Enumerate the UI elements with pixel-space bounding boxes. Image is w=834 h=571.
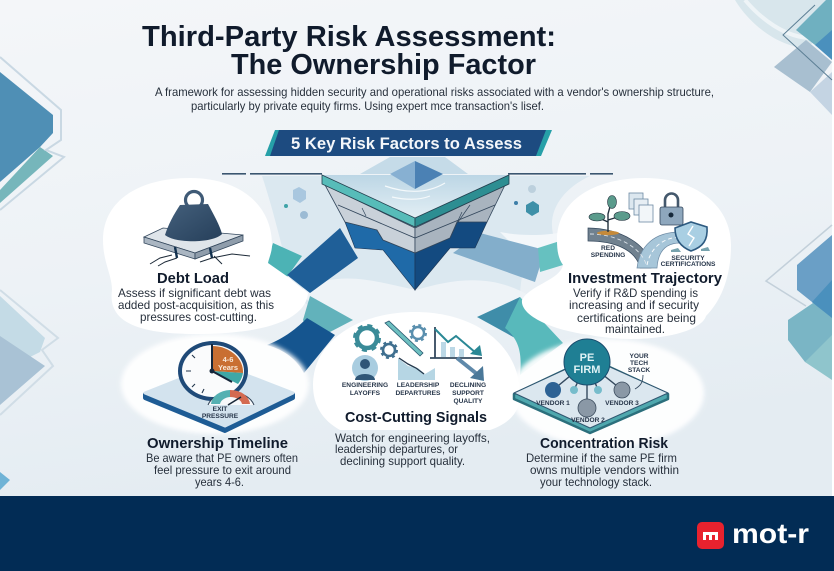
body text: added post-acquisition, as this xyxy=(118,299,274,312)
icon: weight on cracked slab xyxy=(144,192,250,266)
icon: PE firm network on platform: YOUR xyxy=(629,353,649,360)
central backdrop and ribbons xyxy=(262,157,590,375)
body text: pressures cost-cutting. xyxy=(140,311,257,324)
panel background xyxy=(313,312,520,430)
body text xyxy=(526,452,679,489)
icon: gears, person, charts: SUPPORT xyxy=(452,390,484,397)
panel background xyxy=(103,178,308,334)
icon: PE firm network on platform: VENDOR 3 xyxy=(605,400,639,407)
panel: concentration risk xyxy=(510,339,704,489)
icon: PE firm network on platform: VENDOR 2 xyxy=(571,417,605,424)
header rule right xyxy=(508,173,613,175)
panel background xyxy=(522,178,731,339)
icon: gears, person, charts: ENGINEERING xyxy=(342,382,388,389)
icon: gears, person, charts xyxy=(342,321,486,405)
panel background xyxy=(121,334,309,434)
left edge geometric shapes xyxy=(0,57,64,490)
footer band xyxy=(0,496,834,571)
subtitle: particularly by private equity firms. Using expert mce transaction's lisef. xyxy=(191,100,544,113)
icon: PE firm network on platform: FIRM xyxy=(574,364,600,376)
body text: Watch for engineering layoffs, xyxy=(335,432,490,445)
body text: your technology stack. xyxy=(540,476,652,489)
body text: owns multiple vendors within xyxy=(530,464,679,477)
icon: gears, person, charts: LAYOFFS xyxy=(350,390,381,397)
panel: debt load xyxy=(103,178,308,334)
subtitle xyxy=(155,86,714,113)
body text: Determine if the same PE firm xyxy=(526,452,677,465)
heading: Ownership Timeline xyxy=(147,435,288,452)
body text: leadership departures, or xyxy=(335,443,458,456)
heading: Debt Load xyxy=(157,270,229,287)
heading: Cost-Cutting Signals xyxy=(345,409,487,426)
body text: years 4-6. xyxy=(195,476,244,489)
panel: cost-cutting signals xyxy=(313,312,520,468)
heading: Concentration Risk xyxy=(540,435,669,452)
body text: Verify if R&D spending is xyxy=(573,287,698,300)
icon: PE firm network on platform: PE xyxy=(580,352,594,364)
icon: PE firm network on platform: TECH xyxy=(630,360,648,367)
body text: maintained. xyxy=(605,323,665,336)
header rule left xyxy=(222,173,322,175)
body text: Be aware that PE owners often xyxy=(146,452,298,465)
body text: increasing and if security xyxy=(569,299,699,312)
icon: clock and exit gauge on platform: EXIT xyxy=(213,406,227,413)
icon: PE firm network on platform: STACK xyxy=(628,367,650,374)
icon: gears, person, charts: LEADERSHIP xyxy=(397,382,440,389)
panel: investment trajectory xyxy=(522,178,731,339)
logo: mot-r: mot-r xyxy=(732,518,809,549)
icon: plant, documents, lock, shield and roads xyxy=(588,193,716,268)
body text xyxy=(118,287,274,324)
icon: clock and exit gauge on platform: PRESSURE xyxy=(202,413,239,420)
icon: plant, documents, lock, shield and roads: RED xyxy=(601,245,615,252)
icon: gears, person, charts: QUALITY xyxy=(454,398,483,405)
body text xyxy=(569,287,699,336)
logo: mot-r xyxy=(697,518,809,549)
right edge geometric shapes xyxy=(735,0,832,380)
icon: PE firm network on platform xyxy=(514,339,668,433)
icon: clock and exit gauge on platform: Years xyxy=(218,363,238,372)
body text: certifications are being xyxy=(577,312,696,325)
subtitle: A framework for assessing hidden security and operational risks associated with a vendor's ownership structure, xyxy=(155,86,714,99)
title: Third-Party Risk Assessment: xyxy=(142,21,556,53)
body text: declining support quality. xyxy=(340,455,465,468)
central illustration: iceberg xyxy=(322,161,509,290)
banner xyxy=(265,130,552,156)
title xyxy=(142,21,556,81)
icon: plant, documents, lock, shield and roads: CERTIFICATIONS xyxy=(661,261,716,268)
body text xyxy=(146,452,298,489)
body text: Assess if significant debt was xyxy=(118,287,271,300)
title: The Ownership Factor xyxy=(231,49,536,81)
heading: Investment Trajectory xyxy=(568,270,723,287)
icon: clock and exit gauge on platform: 4-6 xyxy=(223,355,233,364)
icon: gears, person, charts: DEPARTURES xyxy=(396,390,441,397)
panel: ownership timeline xyxy=(121,334,309,489)
icon: clock and exit gauge on platform xyxy=(145,341,293,431)
body text: feel pressure to exit around xyxy=(154,464,291,477)
icon: PE firm network on platform: VENDOR 1 xyxy=(536,400,570,407)
banner: 5 Key Risk Factors to Assess xyxy=(291,134,522,153)
icon: gears, person, charts: DECLINING xyxy=(450,382,486,389)
decorative floating shapes xyxy=(284,185,539,219)
body text xyxy=(335,432,490,468)
icon: plant, documents, lock, shield and roads: SPENDING xyxy=(591,252,625,259)
icon: plant, documents, lock, shield and roads: SECURITY xyxy=(671,255,705,262)
panel background xyxy=(510,339,704,447)
